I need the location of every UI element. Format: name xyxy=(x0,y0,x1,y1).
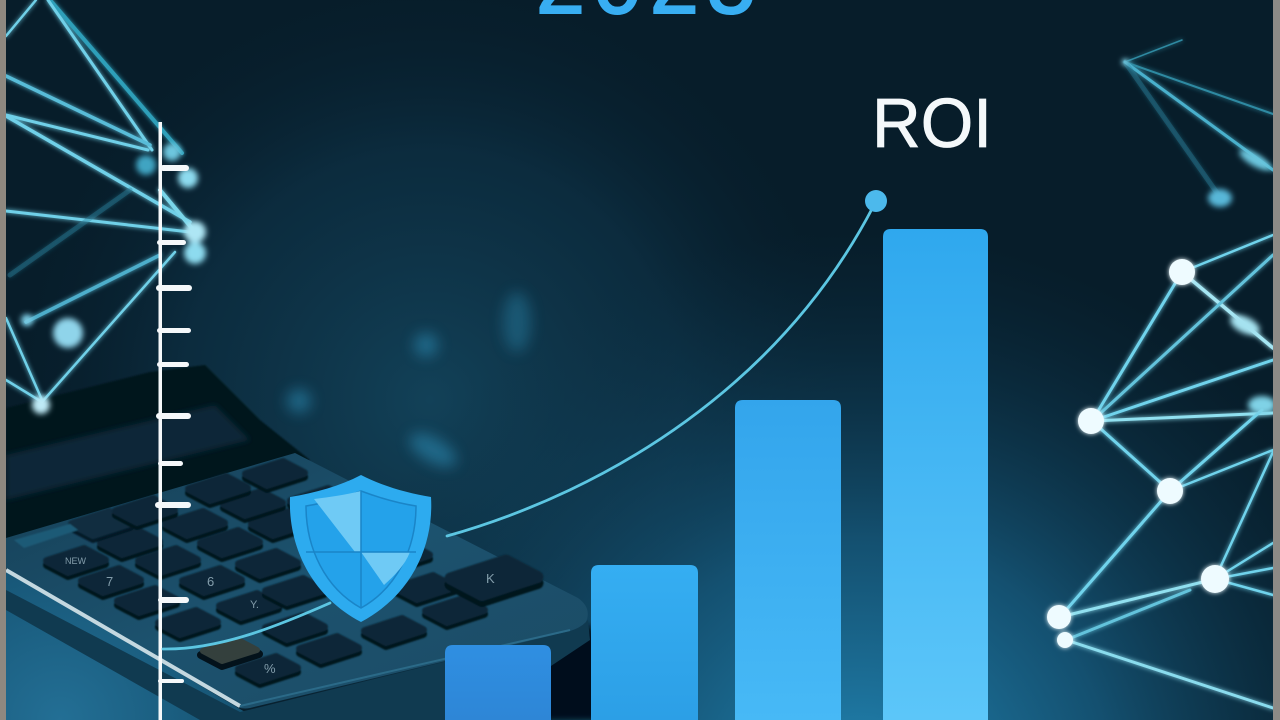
calculator: key labels: % xyxy=(264,661,276,676)
calculator xyxy=(6,365,630,720)
bar 2 xyxy=(591,565,698,720)
curve end point xyxy=(865,190,887,212)
calculator: silver edge xyxy=(6,570,240,706)
calculator: keypad plate xyxy=(6,453,588,708)
calculator: shadow xyxy=(400,625,630,720)
right edge strip xyxy=(1273,0,1280,720)
left network nodes xyxy=(21,143,206,414)
shield icon xyxy=(290,475,431,622)
right network xyxy=(1060,40,1273,708)
calculator: key labels: K xyxy=(486,571,495,586)
growth curve xyxy=(163,207,873,649)
calculator: key labels: Y. xyxy=(250,599,259,611)
calculator: brown key xyxy=(201,640,259,666)
bar 3 xyxy=(735,400,841,720)
bar 4 xyxy=(883,229,988,720)
bokeh lights xyxy=(287,292,531,473)
right network nodes xyxy=(1047,259,1229,648)
calculator: key labels xyxy=(65,556,495,676)
left network xyxy=(6,0,195,402)
calculator: front left surface xyxy=(6,570,245,720)
bar 1 xyxy=(445,645,551,720)
calculator: key labels: NEW xyxy=(65,556,87,566)
left edge strip xyxy=(0,0,6,720)
axis with tick marks xyxy=(155,122,192,720)
right network blurred nodes xyxy=(1122,59,1276,414)
calculator: key labels: 6 xyxy=(207,574,214,589)
calculator: body edge xyxy=(6,590,590,720)
bar chart xyxy=(445,229,988,720)
calculator: key labels: 7 xyxy=(106,574,113,589)
ROI label: ROI xyxy=(872,84,992,162)
calculator: keys xyxy=(14,462,538,684)
calculator: back housing xyxy=(6,365,310,545)
